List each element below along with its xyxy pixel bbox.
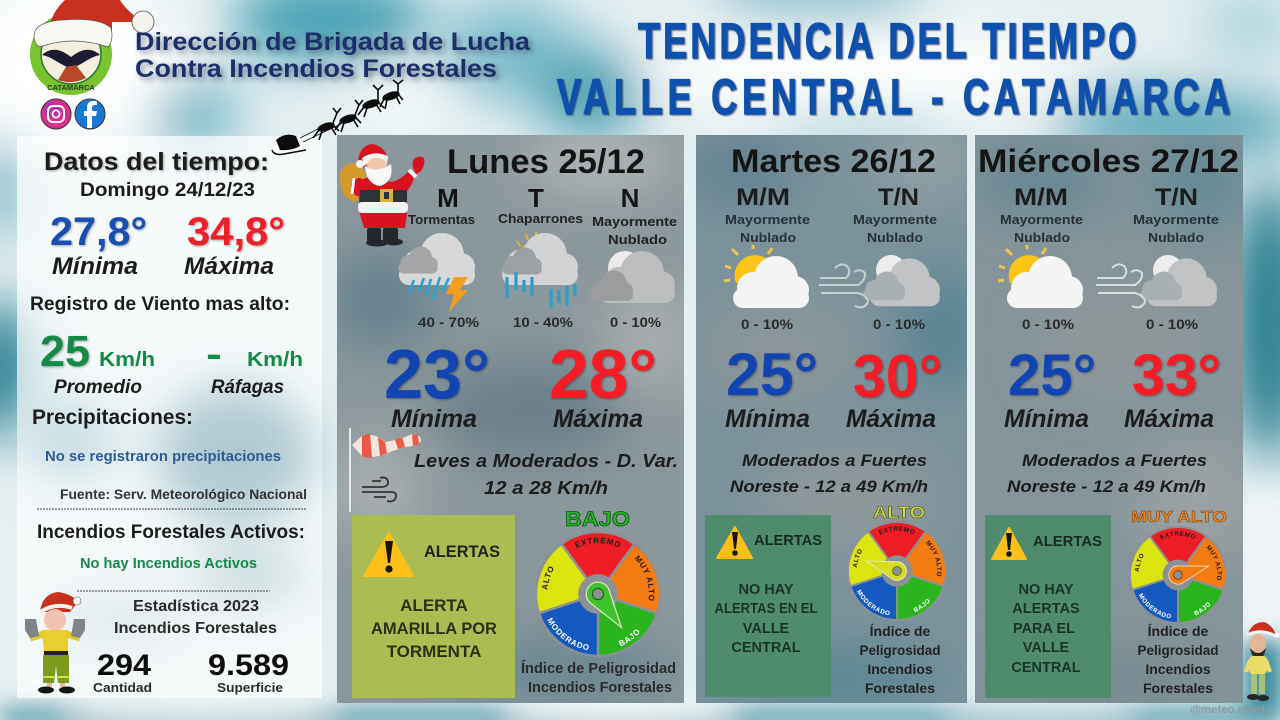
icon: sun behind cloud — [724, 245, 809, 308]
label: alert heading: ALERTAS — [1033, 533, 1102, 550]
number: maximum temperature: 34,8° — [187, 210, 285, 254]
text: wednesday rain chance: 0 - 10% — [1022, 316, 1075, 332]
text: date: Domingo 24/12/23 — [80, 180, 255, 201]
text: afternoon forecast: Nublado — [867, 230, 923, 245]
label: quantity: Cantidad — [93, 680, 152, 695]
number: monday maximum: 28° — [549, 335, 657, 413]
label: minima: Mínima — [52, 253, 138, 280]
heading: monday: Lunes 25/12 — [447, 143, 645, 181]
logo: brigade emblem with santa hat: CATAMARCA — [47, 83, 95, 92]
text: alert message: ALERTAS EN EL — [714, 601, 818, 617]
text: monday rain chance: 0 - 10% — [610, 314, 662, 330]
label: maxima: Máxima — [184, 253, 274, 280]
text: wednesday wind: Moderados a Fuertes — [1022, 451, 1207, 470]
text: fire danger caption: Peligrosidad — [860, 642, 940, 658]
label: tuesday maxima: Máxima — [846, 405, 936, 433]
text: alert message — [371, 596, 497, 661]
number: minimum temperature: 27,8° — [50, 210, 147, 254]
heading: wednesday: Miércoles 27/12 — [978, 143, 1239, 179]
label: afternoon and night: T/N — [878, 184, 919, 211]
title: TENDENCIA DEL TIEMPO — [638, 14, 1136, 69]
text: tuesday wind: Noreste - 12 a 49 Km/h — [730, 477, 928, 496]
panel: day backgrounds — [320, 120, 1260, 706]
label: alert heading: ALERTAS — [424, 542, 500, 561]
heading: precipitation: Precipitaciones: — [32, 406, 193, 429]
icon: warning triangle — [717, 527, 752, 558]
icon: firefighter mascot with beard — [1246, 622, 1280, 701]
label: fire danger level: MUY ALTO — [1131, 509, 1227, 526]
text: morning forecast: Tormentas — [408, 212, 475, 227]
text: morning forecast — [725, 212, 810, 245]
text: alert message: VALLE — [1023, 640, 1070, 656]
text: afternoon forecast: Mayormente — [1133, 212, 1219, 227]
text: afternoon forecast — [853, 212, 937, 245]
number: wednesday maximum: 33° — [1132, 343, 1221, 408]
text: fire danger caption: Índice de — [870, 623, 931, 639]
icon: windsock — [350, 428, 421, 512]
text: wednesday rain chance: 0 - 10% — [1146, 316, 1199, 332]
title — [557, 14, 1230, 125]
icon: wind — [362, 477, 396, 502]
icon: storm cloud — [398, 233, 475, 312]
text: monday rain chance: 10 - 40% — [513, 314, 574, 330]
text: fire danger caption: Incendios — [1145, 661, 1211, 677]
text: morning forecast: Nublado — [1014, 230, 1070, 245]
heading: statistics: Estadística 2023 — [133, 598, 259, 615]
label: area: Superficie — [217, 680, 283, 695]
panel: monday — [349, 143, 678, 698]
panel: daily data (left column) — [30, 148, 307, 695]
text: alert message: CENTRAL — [1011, 660, 1081, 676]
label: afternoon: T — [528, 183, 544, 213]
chart: fire danger gauge: MUY ALTO — [926, 540, 942, 576]
label: fire danger level: BAJO — [565, 508, 630, 531]
icon: santa sleigh and reindeer — [272, 80, 403, 154]
text: alert message: AMARILLA POR — [371, 619, 497, 638]
label: wednesday maxima: Máxima — [1124, 405, 1214, 433]
text: fire danger caption: Incendios — [867, 661, 933, 677]
label: alert heading: ALERTAS — [754, 532, 822, 549]
panel: wednesday — [978, 143, 1239, 698]
number: monday minimum: 23° — [384, 335, 490, 413]
text: alert message: NO HAY — [1018, 582, 1074, 598]
text: fire danger caption: Forestales — [1143, 680, 1213, 696]
chart: fire danger gauge: MUY ALTO — [1206, 544, 1222, 580]
text: monday rain chance — [418, 314, 662, 330]
title: VALLE CENTRAL - CATAMARCA — [557, 70, 1230, 125]
text: alert message: TORMENTA — [387, 642, 481, 661]
label: morning: M — [437, 183, 459, 213]
text: source: Fuente: Serv. Meteorológico Nacional — [60, 487, 307, 502]
chart: fire danger gauge: MODERADO — [547, 618, 589, 650]
chart: fire danger gauge: ALTO — [542, 566, 554, 590]
icon: wind and night cloud — [1096, 255, 1217, 307]
icon: warning triangle — [992, 528, 1026, 559]
number: tuesday maximum: 30° — [853, 343, 942, 410]
text: alert message — [1011, 582, 1081, 676]
icon: firefighter with santa hat — [25, 592, 85, 694]
label: night: N — [621, 183, 639, 213]
unit: average wind: Km/h — [99, 349, 155, 371]
text: tuesday rain chance — [741, 316, 926, 332]
text: night forecast: Nublado — [608, 232, 667, 247]
text: wednesday wind: Noreste - 12 a 49 Km/h — [1007, 477, 1206, 496]
chart: fire danger gauge: MODERADO — [857, 590, 890, 615]
label: fire danger level: ALTO — [873, 503, 925, 522]
number: wednesday minimum: 25° — [1008, 343, 1096, 408]
text: tuesday wind: Moderados a Fuertes — [742, 451, 927, 470]
text: afternoon forecast: Nublado — [1148, 230, 1204, 245]
heading: datos del tiempo: Datos del tiempo: — [44, 148, 269, 176]
chart: fire danger gauge: BAJO — [1194, 602, 1210, 616]
icon: showers with sun — [502, 232, 578, 308]
label: monday minima: Mínima — [391, 405, 477, 433]
text: no precipitation: No se registraron precipitaciones — [45, 449, 281, 465]
number: gusts: - — [206, 333, 222, 374]
chart: fire danger gauge: EXTREMO — [878, 526, 914, 534]
chart: fire danger gauge: EXTREMO — [1160, 531, 1196, 540]
text: morning forecast — [1000, 212, 1083, 245]
chart: fire danger gauge: MODERADO — [1138, 593, 1171, 618]
icon: sun behind cloud — [998, 245, 1083, 308]
text: fire danger caption — [860, 623, 940, 696]
text: alert message: VALLE — [743, 621, 790, 637]
panel: left data background — [17, 136, 322, 698]
text: alert message: CENTRAL — [731, 640, 801, 656]
chart: fire danger gauge: ALTO — [852, 549, 862, 568]
heading: brigade name — [135, 28, 531, 83]
text: fire danger caption: Índice de Peligrosidad — [521, 660, 676, 677]
number: area: 9.589 — [208, 649, 289, 682]
label: promedio: Promedio — [54, 377, 142, 398]
text: tuesday rain chance: 0 - 10% — [873, 316, 926, 332]
text: morning forecast: Nublado — [740, 230, 796, 245]
icon: santa claus — [340, 144, 424, 246]
label: wednesday minima: Mínima — [1004, 405, 1089, 433]
text: fire danger caption: Forestales — [865, 680, 935, 696]
text: tuesday wind — [730, 451, 928, 496]
text: afternoon forecast: Mayormente — [853, 212, 937, 227]
chart: fire danger gauge: ALTO — [1134, 554, 1144, 572]
icon: wind and night cloud — [819, 255, 940, 307]
chart: fire danger gauge: BAJO — [618, 630, 640, 646]
text: monday wind: Leves a Moderados - D. Var. — [414, 451, 678, 471]
text: fire danger caption — [521, 660, 676, 696]
chart: fire danger gauge: BAJO — [913, 599, 930, 612]
callout: wednesday alert — [985, 515, 1111, 698]
icon: facebook — [75, 99, 105, 129]
text: fire danger caption: Índice de — [1148, 623, 1209, 639]
text: author handle: @meteo.charly — [1190, 704, 1272, 716]
logo: brigade emblem with santa hat — [29, 0, 154, 96]
text: alert message — [714, 582, 818, 656]
number: tuesday minimum: 25° — [726, 341, 818, 408]
text: fire danger caption: Peligrosidad — [1138, 642, 1218, 658]
text: afternoon forecast: Chaparrones — [498, 211, 583, 226]
icon: warning triangle — [364, 533, 413, 576]
label: monday maxima: Máxima — [553, 405, 643, 433]
text: night forecast — [592, 214, 677, 247]
text: wednesday wind — [1007, 451, 1207, 496]
text: monday wind speed: 12 a 28 Km/h — [484, 478, 608, 498]
label: tuesday minima: Mínima — [725, 405, 810, 433]
unit: gusts: Km/h — [247, 349, 303, 371]
label: rafagas: Ráfagas — [211, 377, 284, 398]
heading: statistics subject: Incendios Forestales — [114, 620, 277, 637]
chart: fire danger gauge — [1130, 526, 1226, 624]
text: alert message: ALERTAS — [1012, 601, 1080, 617]
text: no active fires: No hay Incendios Activos — [80, 556, 257, 572]
chart: fire danger gauge: MUY ALTO — [634, 555, 654, 601]
icon: instagram — [41, 99, 71, 129]
text: wednesday rain chance — [1022, 316, 1199, 332]
number: quantity: 294 — [97, 649, 151, 682]
label: morning and midday: M/M — [1014, 184, 1068, 211]
text: morning forecast: Mayormente — [725, 212, 810, 227]
text: tuesday rain chance: 0 - 10% — [741, 316, 794, 332]
text: fire danger caption — [1138, 623, 1218, 696]
text: afternoon forecast — [1133, 212, 1219, 245]
label: morning and midday: M/M — [736, 184, 790, 211]
text: fire danger caption: Incendios Forestales — [528, 680, 672, 696]
heading: brigade name: Dirección de Brigada de Lucha — [135, 28, 531, 56]
chart: fire danger gauge — [847, 523, 947, 621]
heading: tuesday: Martes 26/12 — [731, 143, 936, 179]
text: monday rain chance: 40 - 70% — [418, 314, 480, 330]
text: night forecast: Mayormente — [592, 214, 677, 229]
text: alert message: ALERTA — [400, 596, 468, 615]
chart: fire danger gauge — [537, 532, 660, 658]
chart: fire danger gauge: EXTREMO — [574, 538, 620, 548]
text: alert message: NO HAY — [738, 582, 794, 598]
panel: tuesday — [705, 143, 947, 697]
label: afternoon and night: T/N — [1155, 184, 1198, 211]
text: morning forecast: Mayormente — [1000, 212, 1083, 227]
heading: wind record: Registro de Viento mas alto: — [30, 294, 290, 315]
callout: tuesday alert — [705, 515, 831, 697]
number: average wind: 25 — [40, 327, 90, 376]
heading: active fires: Incendios Forestales Activos: — [37, 522, 305, 543]
callout: monday alert — [352, 515, 515, 698]
heading: brigade name: Contra Incendios Forestales — [135, 55, 497, 83]
text: alert message: PARA EL — [1013, 621, 1075, 637]
icon: night cloud — [589, 251, 675, 303]
